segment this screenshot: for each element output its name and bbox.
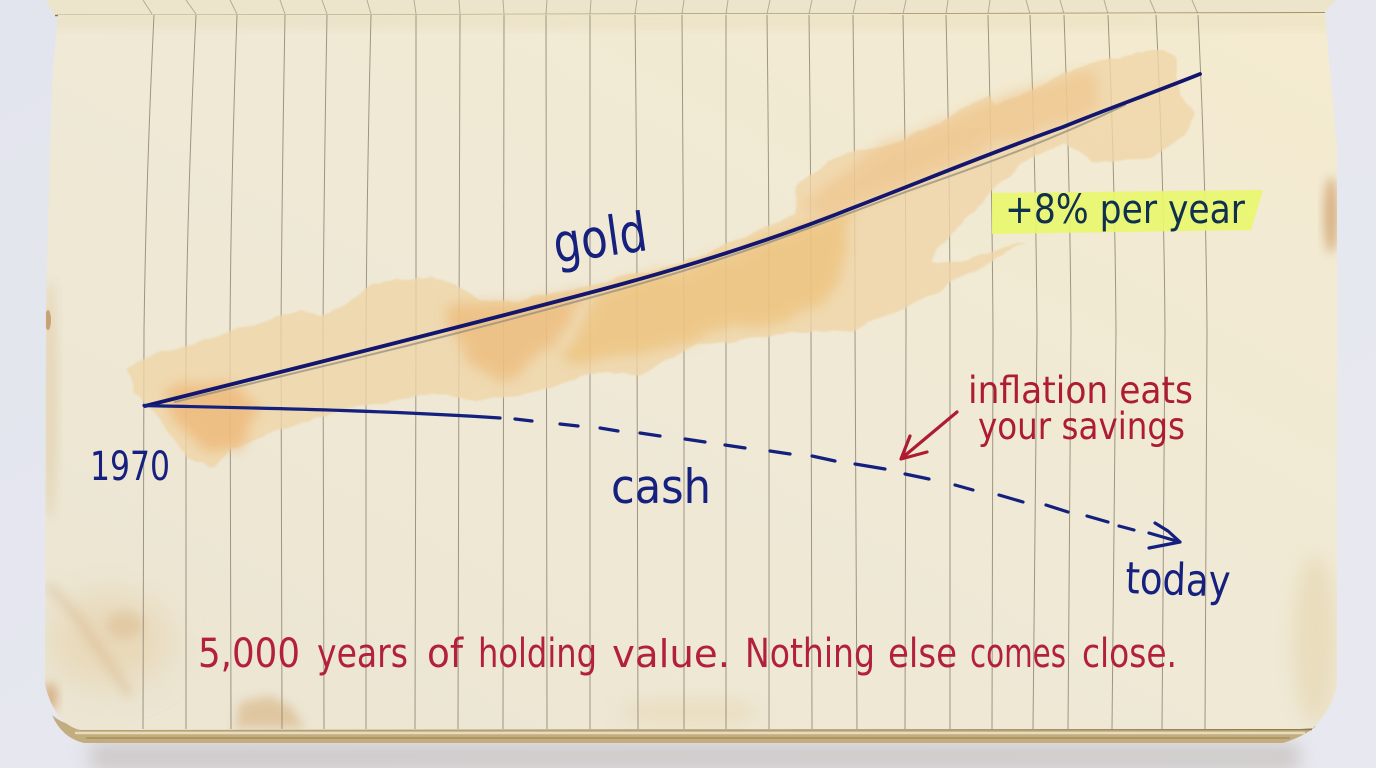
label: gold: gold: [549, 200, 651, 276]
closing statement: value.: [612, 632, 730, 676]
annotation: inflation: inflation eats: [968, 369, 1193, 412]
annotation: inflation: [968, 369, 1193, 448]
closing statement: [198, 631, 1177, 677]
label: growth rate: +8% per year: [1005, 187, 1245, 233]
gold line: [145, 74, 1200, 406]
label: today: today: [1125, 553, 1231, 608]
highlighter behind growth label: [992, 190, 1263, 234]
red arrow: [901, 412, 957, 459]
closing statement: Nothing: [745, 631, 875, 677]
closing statement: 5,000: [198, 631, 300, 677]
closing statement: else: [888, 631, 957, 677]
gold watercolor band: [125, 48, 1196, 468]
closing statement: comes: [970, 631, 1066, 677]
label: cash: cash: [611, 460, 711, 515]
facing page strip at top: [46, 0, 1336, 16]
cash solid line: [144, 406, 500, 418]
closing statement: close.: [1082, 631, 1177, 677]
page stack at bottom: [52, 715, 1316, 743]
closing statement: years: [317, 631, 408, 677]
ruled lines: [143, 15, 1207, 729]
annotation: inflation: your savings: [978, 405, 1185, 448]
arrowhead at today: [1149, 523, 1180, 548]
closing statement: holding: [478, 631, 597, 677]
closing statement: of: [427, 631, 464, 677]
label: 1970: 1970: [90, 444, 170, 490]
cash dashed line: [515, 419, 1134, 530]
